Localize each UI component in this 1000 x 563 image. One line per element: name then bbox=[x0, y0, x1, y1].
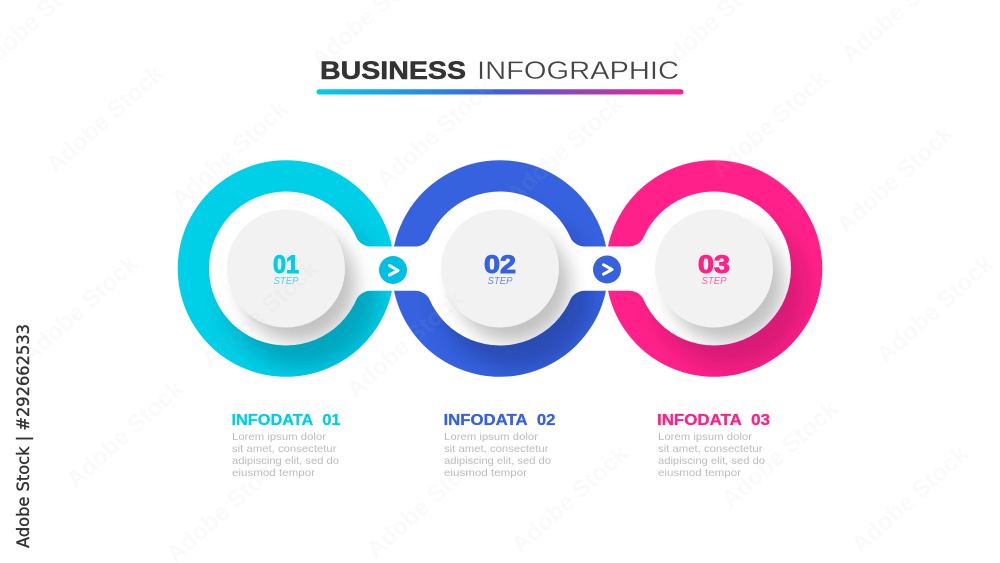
disc shadows bbox=[240, 226, 784, 342]
arrow: step 1 to step 2 bbox=[379, 256, 407, 284]
text block: infodata 03 bbox=[657, 412, 770, 479]
ring: step 2 bbox=[392, 160, 608, 377]
text block: infodata 01: adipiscing elit, sed do bbox=[232, 455, 339, 467]
step 2 disc: 02 bbox=[484, 251, 516, 279]
text block: infodata 01: eiusmod tempor bbox=[232, 467, 316, 479]
text block: infodata 01 bbox=[232, 412, 341, 479]
watermark pattern: Adobe Stock bbox=[846, 440, 974, 559]
text block: infodata 03: adipiscing elit, sed do bbox=[658, 455, 765, 467]
text block: infodata 02: INFODATA 02 bbox=[444, 412, 556, 429]
text block: infodata 03: Lorem ipsum dolor bbox=[658, 431, 753, 443]
step 2 disc: STEP bbox=[488, 276, 513, 287]
text block: infodata 03: eiusmod tempor bbox=[658, 467, 742, 479]
text block: infodata 02: eiusmod tempor bbox=[444, 467, 528, 479]
watermark pattern: Adobe Stock bbox=[196, 255, 324, 374]
watermark pattern: Adobe Stock bbox=[831, 120, 959, 239]
text block: infodata 02: adipiscing elit, sed do bbox=[444, 455, 551, 467]
step 3 disc: STEP bbox=[702, 276, 727, 287]
step 2 disc bbox=[441, 210, 559, 328]
watermark pattern: Adobe Stock bbox=[706, 65, 834, 184]
step 1 disc: STEP bbox=[274, 276, 299, 287]
watermark pattern: Adobe Stock bbox=[716, 395, 844, 514]
text block: infodata 01: sit amet, consectetur bbox=[232, 443, 337, 455]
title bbox=[320, 57, 679, 85]
watermark pattern: Adobe Stock bbox=[371, 75, 499, 194]
step rings bbox=[178, 160, 822, 377]
ring: step 1 bbox=[178, 160, 394, 377]
infographic canvas bbox=[16, 61, 822, 548]
step 3 disc bbox=[655, 210, 773, 328]
watermark pattern: Adobe Stock bbox=[871, 250, 999, 369]
step 3 disc: 03 bbox=[698, 251, 730, 279]
watermark pattern: Adobe Stock bbox=[41, 60, 169, 179]
watermark pattern: Adobe Stock bbox=[166, 95, 294, 214]
watermark pattern: Adobe Stock bbox=[361, 445, 489, 563]
step 1 disc bbox=[227, 210, 345, 328]
title: BUSINESS bbox=[320, 57, 466, 85]
watermark pattern: Adobe Stock bbox=[501, 90, 629, 209]
text block: infodata 02 bbox=[444, 412, 556, 479]
step 1 disc: 01 bbox=[273, 251, 299, 279]
watermark pattern: Adobe Stock bbox=[341, 285, 469, 404]
arrow: step 2 to step 3 bbox=[593, 256, 621, 284]
stock id side label: Adobe Stock | #292662533 bbox=[14, 324, 34, 548]
text block: infodata 03: sit amet, consectetur bbox=[658, 443, 763, 455]
text block: infodata 03: INFODATA 03 bbox=[657, 412, 770, 429]
watermark pattern: Adobe Stock bbox=[16, 250, 144, 369]
text block: infodata 01: Lorem ipsum dolor bbox=[232, 431, 327, 443]
white connector band bbox=[209, 192, 791, 346]
watermark pattern: Adobe Stock bbox=[506, 440, 634, 559]
text block: infodata 02: sit amet, consectetur bbox=[444, 443, 549, 455]
title: INFOGRAPHIC bbox=[477, 57, 679, 85]
text block: infodata 01: INFODATA 01 bbox=[232, 412, 341, 429]
ring: step 3 bbox=[606, 160, 822, 377]
watermark pattern: Adobe Stock bbox=[61, 375, 189, 494]
text block: infodata 02: Lorem ipsum dolor bbox=[444, 431, 539, 443]
title gradient underline bbox=[316, 89, 684, 94]
